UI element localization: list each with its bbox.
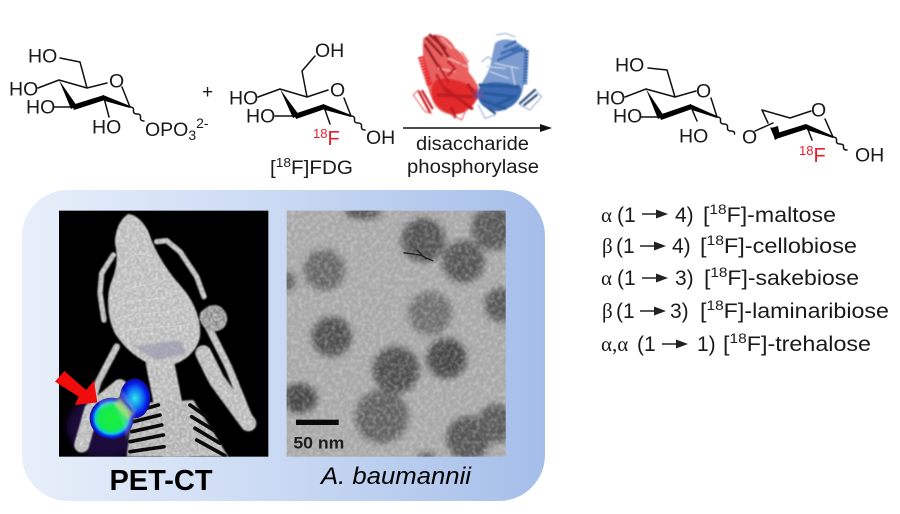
plus sign: + <box>202 82 213 103</box>
label: 18F: F <box>327 128 340 150</box>
image: PET-CT scan <box>55 211 268 458</box>
item: cellobiose: F]-cellobiose <box>724 235 857 258</box>
label: [18F]FDG: 18 <box>276 155 291 170</box>
ribs <box>130 405 225 456</box>
item: maltose: 4) <box>675 204 694 227</box>
item: trehalose: 18 <box>729 330 747 346</box>
item: maltose: (1 <box>617 204 636 227</box>
enzyme label: phosphorylase <box>407 157 539 178</box>
skull contour lines <box>115 254 195 333</box>
item: cellobiose: [ <box>700 235 706 258</box>
item: cellobiose: 18 <box>707 232 724 248</box>
list of radiolabelled disaccharides <box>601 201 889 356</box>
item: maltose <box>601 201 836 227</box>
item: maltose: 18 <box>709 201 727 217</box>
item: cellobiose: (1 <box>616 235 635 258</box>
item: sakebiose: (1 <box>617 267 636 290</box>
molecule: glucose-1-phosphate: OPO <box>145 119 188 141</box>
item: sakebiose: 18 <box>710 264 728 280</box>
item: cellobiose: β <box>602 234 613 258</box>
item: trehalose: 1) <box>697 333 716 356</box>
item: sakebiose: 3) <box>675 267 694 290</box>
item: laminaribiose: F]-laminaribiose <box>724 300 889 323</box>
image: A. baumannii TEM micrograph <box>286 210 506 457</box>
item: sakebiose: F]-sakebiose <box>727 267 859 290</box>
purple haze behind bones <box>64 393 131 457</box>
molecule: 18F-disaccharide product <box>596 54 884 167</box>
item: maltose: [ <box>703 204 709 227</box>
caption: PET-CT: PET-CT <box>109 465 213 497</box>
molecule: 18F-disaccharide product: OH <box>855 144 884 166</box>
molecule: [18F]FDG: OH <box>315 40 344 62</box>
label: [18F]FDG: [ <box>270 157 275 179</box>
molecule: [18F]FDG: HO <box>246 106 275 128</box>
molecule: [18F]FDG <box>229 40 395 179</box>
scale label: 50 nm <box>293 433 344 452</box>
molecule: 18F-disaccharide product: O <box>742 126 757 148</box>
item: laminaribiose: 3) <box>670 300 689 323</box>
enzyme label <box>407 134 539 178</box>
panel: imaging results <box>22 190 545 501</box>
item: trehalose <box>601 330 871 356</box>
scale bar <box>296 420 339 425</box>
item: maltose: α <box>601 203 612 227</box>
molecule: 18F-disaccharide product: O <box>811 100 826 122</box>
molecule: [18F]FDG: HO <box>229 88 258 110</box>
molecule: 18F-disaccharide product: HO <box>679 126 708 148</box>
molecule: glucose-1-phosphate: HO <box>9 78 38 100</box>
molecule: 18F-disaccharide product: HO <box>613 106 642 128</box>
icon: red arrow <box>55 371 97 405</box>
item: laminaribiose: β <box>602 299 613 323</box>
molecule: [18F]FDG: OH <box>366 127 395 149</box>
item: cellobiose <box>602 232 857 258</box>
caption: A. baumannii: A. baumannii <box>319 463 472 490</box>
item: laminaribiose <box>602 297 889 323</box>
item: sakebiose: α <box>601 266 612 290</box>
molecule: glucose-1-phosphate: HO <box>92 116 121 138</box>
red subunit <box>413 35 479 120</box>
molecule: glucose-1-phosphate: 3 <box>188 127 196 143</box>
molecule: glucose-1-phosphate: HO <box>26 96 55 118</box>
enzyme label: disaccharide <box>416 134 529 155</box>
item: cellobiose: 4) <box>672 235 691 258</box>
item: laminaribiose: [ <box>700 300 706 323</box>
molecule: [18F]FDG: O <box>330 80 345 102</box>
label: 18F: F <box>813 145 826 167</box>
item: sakebiose <box>601 264 859 290</box>
label: 18F: 18 <box>799 143 813 158</box>
label: 18F: 18 <box>313 126 327 141</box>
reaction arrow <box>403 124 552 132</box>
item: sakebiose: [ <box>704 267 710 290</box>
item: trehalose: F]-trehalose <box>747 333 871 356</box>
molecule: 18F-disaccharide product: HO <box>615 54 644 76</box>
molecule: glucose-1-phosphate: 2- <box>196 115 209 131</box>
item: laminaribiose: (1 <box>616 300 635 323</box>
molecule: glucose-1-phosphate: HO <box>28 46 57 68</box>
skeleton <box>82 214 250 457</box>
molecule: glucose-1-phosphate: O <box>109 70 124 92</box>
item: trehalose: [ <box>723 333 729 356</box>
molecule: 18F-disaccharide product: HO <box>596 88 625 110</box>
molecule: glucose-1-phosphate <box>9 46 209 143</box>
item: trehalose: α,α <box>601 332 628 356</box>
item: maltose: F]-maltose <box>727 204 836 227</box>
item: laminaribiose: 18 <box>706 297 724 313</box>
molecule: 18F-disaccharide product: O <box>696 80 711 102</box>
protein: disaccharide phosphorylase <box>413 33 542 120</box>
blue subunit <box>478 33 542 118</box>
item: trehalose: (1 <box>637 333 656 356</box>
PET signal <box>90 378 150 440</box>
label: [18F]FDG: F]FDG <box>291 157 353 179</box>
